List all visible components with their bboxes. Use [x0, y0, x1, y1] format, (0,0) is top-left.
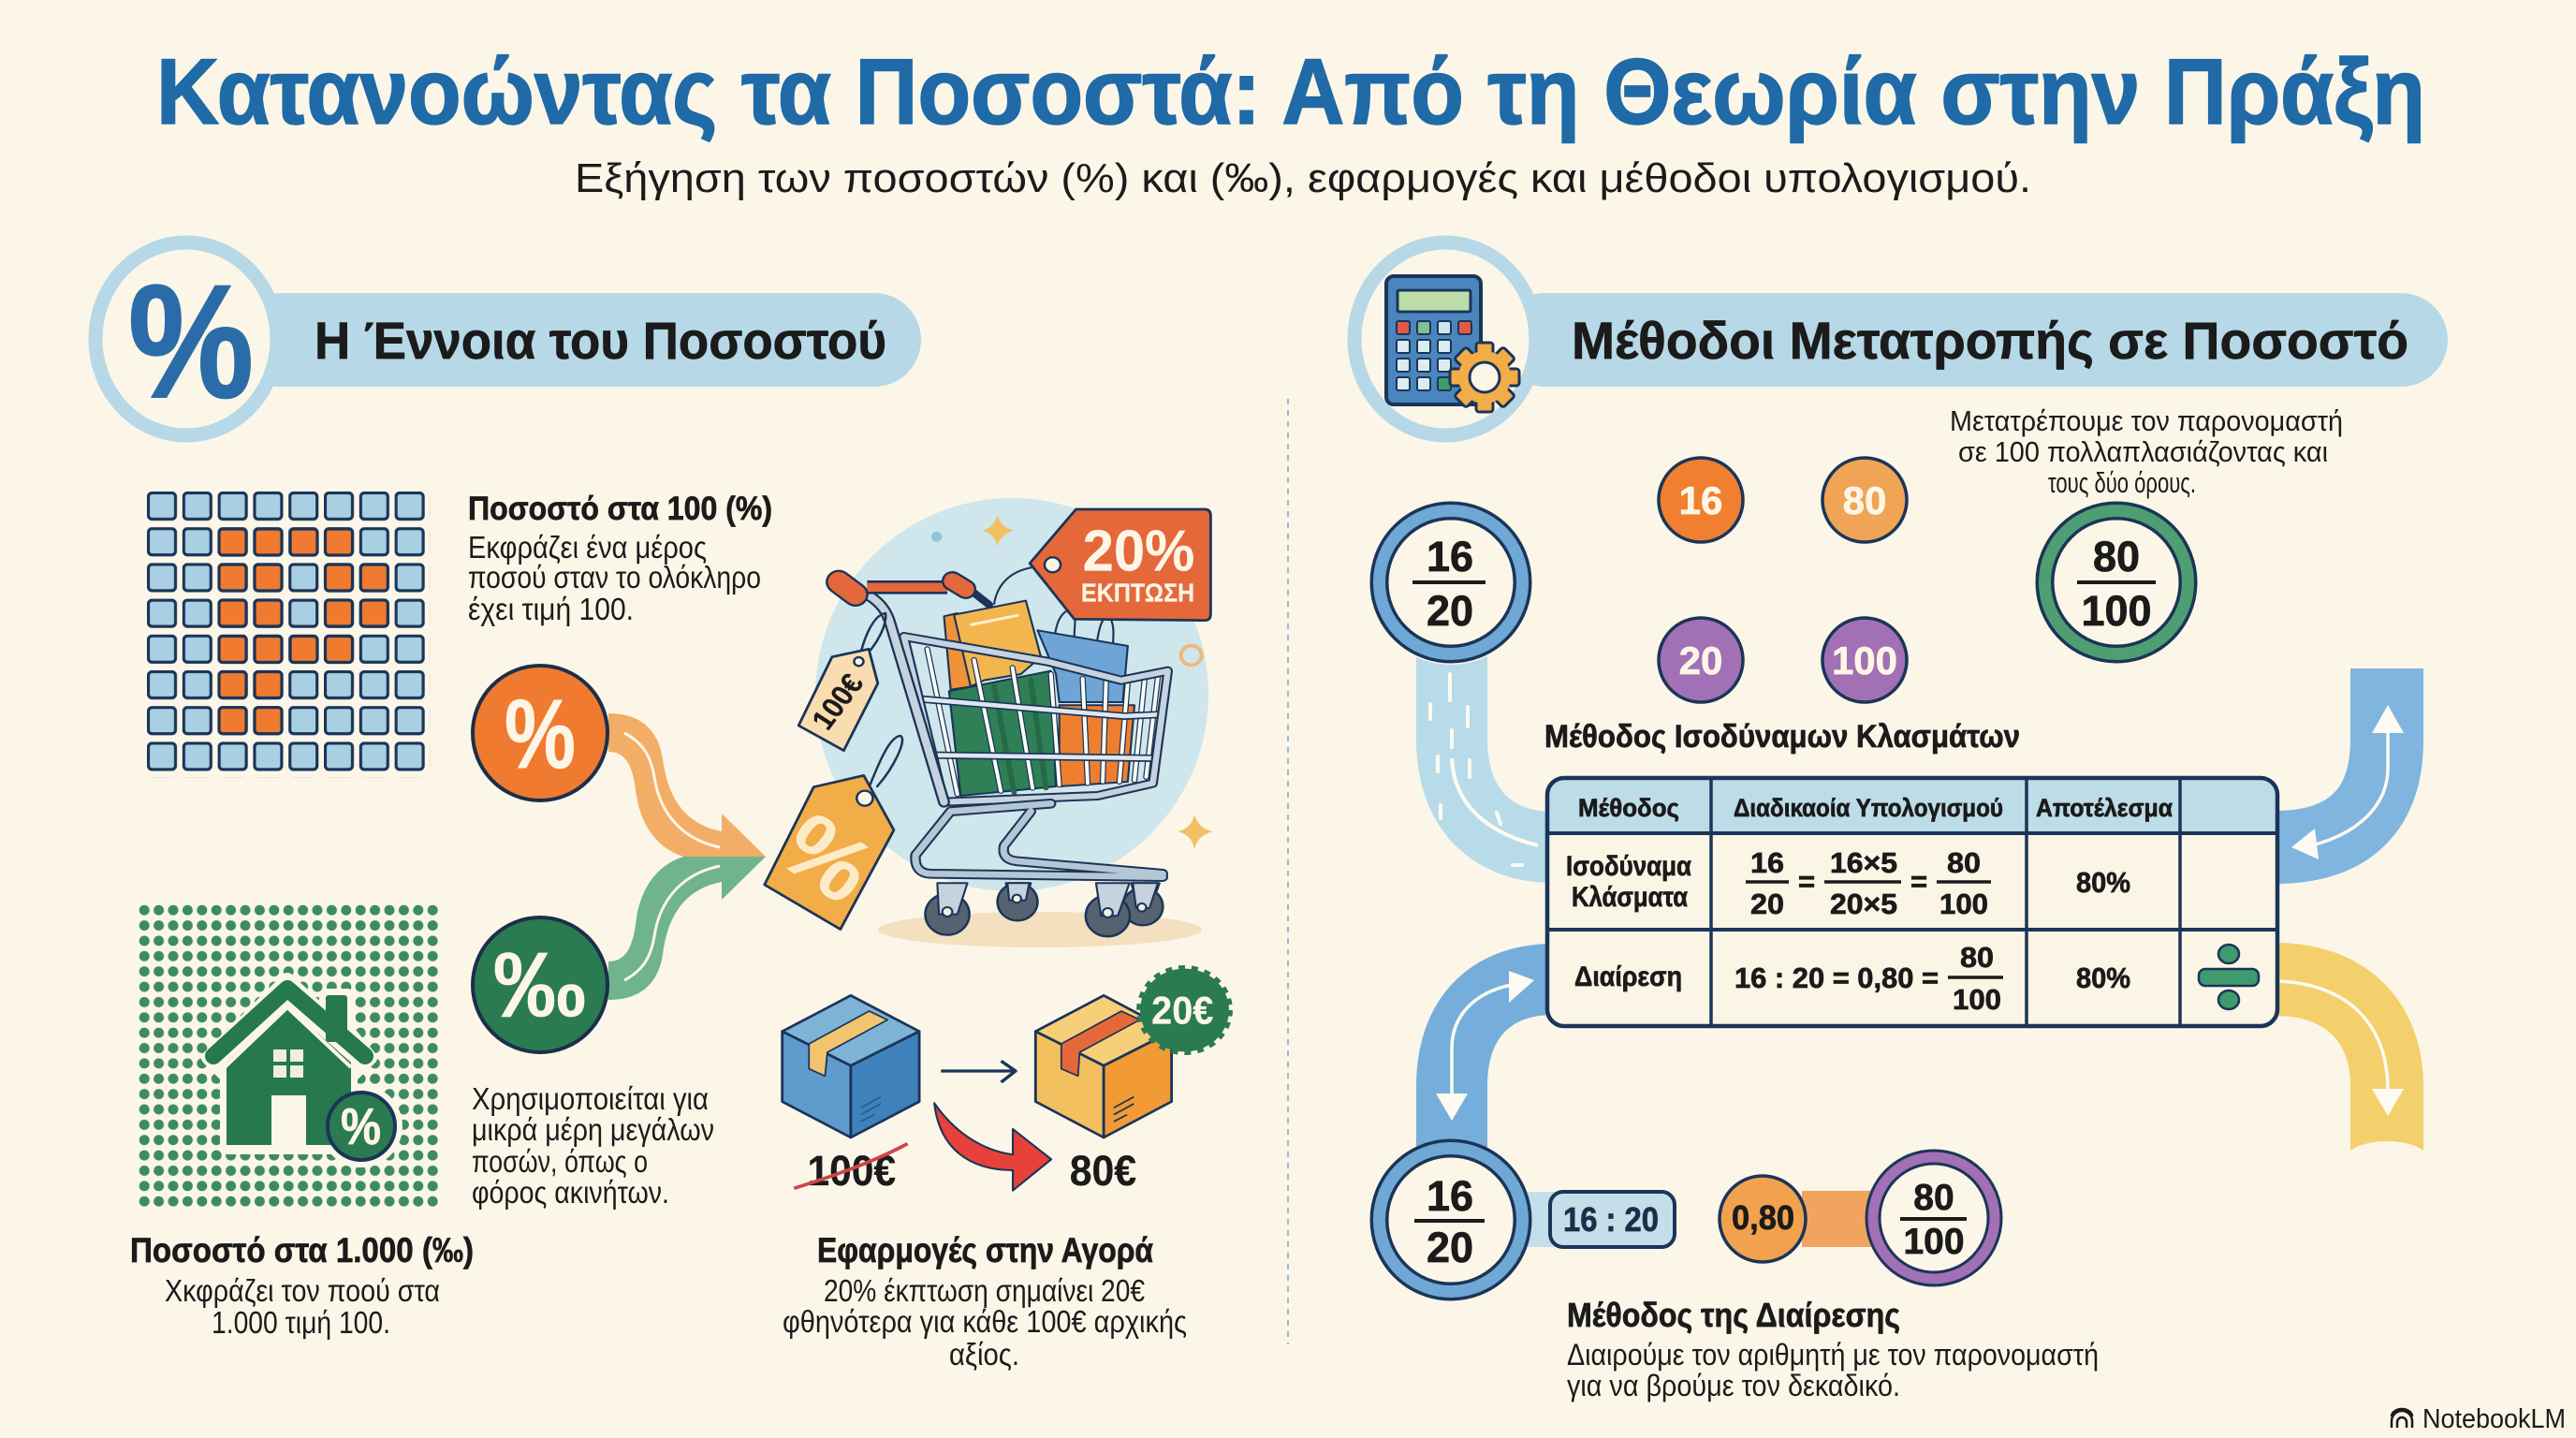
circle: 0,80	[1720, 1176, 1806, 1262]
table row: equivalent fractions	[1566, 846, 2130, 920]
link to division box	[1521, 1192, 1559, 1247]
cart wheels	[925, 883, 1163, 936]
tag: 100 euro: 100€	[805, 668, 871, 736]
text block: division method: για να βρούμε τον δεκαδικό.	[1567, 1369, 1900, 1402]
icon: house on dot field	[137, 902, 440, 1209]
circle: 100: 100	[1832, 638, 1897, 682]
text block: division method	[1567, 1296, 2099, 1402]
icon: calculator with gear	[1386, 276, 1519, 412]
section heading: Μέθοδοι Μετατροπής σε Ποσοστό	[1572, 311, 2408, 370]
icon: orange percent circle	[473, 666, 607, 800]
subtitle: Εξήγηση των ποσοστών (%) και (‰), εφαρμογές και μέθοδοι υπολογισμού.	[575, 155, 2031, 201]
table row: division	[1574, 941, 2259, 1016]
text block: percent of 100: Εκφράζει ένα μέρος	[468, 530, 707, 565]
text block: division method: Διαιρούμε τον αριθμητή με τον παρονομαστή	[1567, 1338, 2099, 1372]
section header: methods	[1354, 242, 2448, 435]
cart handle	[839, 581, 966, 594]
text block: market applications: 20% έκπτωση σημαίνει 20€	[824, 1273, 1145, 1308]
logo: NotebookLM: NotebookLM	[2422, 1404, 2566, 1434]
fraction circle: 16 over 20 (bottom): 20	[1427, 1224, 1473, 1271]
table row: equivalent fractions: 80%	[2076, 866, 2130, 899]
fraction circle: 16 over 20 (top): 16	[1427, 533, 1473, 580]
circle: 20	[1659, 618, 1743, 702]
text: small parts usage: φόρος ακινήτων.	[472, 1175, 669, 1210]
table row: equivalent fractions: 20	[1750, 888, 1784, 920]
price: new: 80€	[1070, 1146, 1136, 1195]
text block: market applications: Εφαρμογές στην Αγορά	[817, 1231, 1153, 1269]
text: multiply both terms: τους δύο όρους.	[2048, 466, 2196, 499]
table row: equivalent fractions: Κλάσματα	[1572, 882, 1688, 913]
table row: division: 16 : 20 = 0,80 =	[1734, 961, 1939, 994]
tag: percent: %	[761, 794, 894, 923]
text block: percent of 100	[468, 491, 772, 626]
panel: conversion methods	[1354, 242, 2448, 1402]
text block: percent of 1000: Ποσοστό στα 1.000 (‰)	[130, 1231, 474, 1269]
cart contents	[944, 601, 1134, 796]
connector: blue up	[2275, 668, 2404, 859]
fraction circle: 16 over 20 (bottom): 16	[1427, 1172, 1473, 1220]
text: multiply both terms: σε 100 πολλαπλασιάζοντας και	[1958, 435, 2328, 468]
connector: light blue	[1430, 646, 1554, 865]
title: Κατανοώντας τα Ποσοστά: Από τη Θεωρία στην Πράξη	[156, 39, 2425, 143]
table row: division: 80	[1960, 941, 1994, 974]
text: small parts usage: μικρά μέρη μεγάλων	[472, 1112, 714, 1147]
circle: 0,80: 0,80	[1732, 1198, 1794, 1237]
badge: 20 euro: 20€	[1151, 990, 1213, 1033]
text block: market applications	[783, 1231, 1187, 1372]
fraction circle: 80 over 100 (top)	[2034, 500, 2199, 665]
section header: concept	[95, 242, 921, 435]
table header	[1578, 794, 2173, 822]
circle: 80: 80	[1843, 478, 1886, 522]
circle: 100	[1822, 618, 1907, 702]
panel: concept of percentage	[95, 242, 1229, 1372]
table row: equivalent fractions: 16×5	[1830, 846, 1897, 879]
icon: orange percent circle: %	[505, 680, 576, 789]
text block: market applications: φθηνότερα για κάθε 100€ αρχικής	[783, 1304, 1187, 1339]
icon: blue box	[783, 995, 919, 1137]
text block: percent of 100: Ποσοστό στα 100 (%)	[468, 491, 772, 527]
chart: 8x8 percent grid	[147, 492, 430, 778]
table row: equivalent fractions: Ισοδύναμα	[1566, 851, 1691, 882]
table row: equivalent fractions: 80	[1947, 846, 1981, 879]
icon: divide sign	[2199, 945, 2259, 1009]
number circles	[1659, 458, 1907, 702]
arrow: red curved	[934, 1103, 1051, 1191]
text block: percent of 1000: 1.000 τιμή 100.	[212, 1305, 390, 1340]
connector: yellow down	[2275, 979, 2430, 1181]
text: small parts usage	[472, 1081, 714, 1210]
circle: 80	[1822, 458, 1907, 542]
fraction circle: 80 over 100 (top): 100	[2081, 587, 2152, 635]
text block: percent of 1000: Χκφράζει τον ποού στα	[165, 1273, 440, 1308]
connector: blue down	[1436, 971, 1554, 1161]
box: 16 divided by 20	[1550, 1192, 1675, 1247]
circle: 16	[1659, 458, 1743, 542]
text: small parts usage: ποσών, όπως ο	[472, 1144, 648, 1179]
link: decimal to fraction	[1802, 1191, 1877, 1247]
cart wires	[867, 593, 1168, 877]
table row: equivalent fractions: =	[1798, 865, 1815, 898]
fraction circle: 80 over 100 (bottom): 100	[1903, 1222, 1965, 1262]
section heading: Η Έννοια του Ποσοστού	[315, 311, 886, 370]
text block: division method: Μέθοδος της Διαίρεσης	[1567, 1296, 1900, 1334]
text block: percent of 1000	[130, 1231, 474, 1340]
table header: Μέθοδος	[1578, 794, 1679, 822]
arrow: green to cart	[608, 857, 766, 1000]
illustration: shopping cart with tags	[761, 498, 1213, 947]
tag: percent	[761, 736, 902, 930]
fraction circle: 16 over 20 (top): 20	[1427, 587, 1473, 635]
table row: division: 100	[1953, 983, 2001, 1016]
table row: division: 80%	[2076, 961, 2130, 994]
fraction circle: 80 over 100 (top): 80	[2093, 533, 2140, 580]
fraction circle: 16 over 20 (top)	[1368, 500, 1533, 665]
tag: 100 euro	[798, 613, 886, 751]
fraction circle: 16 over 20 (bottom)	[1380, 1148, 1559, 1292]
arrow: black right	[941, 1061, 1016, 1082]
badge: 20 euro	[1140, 969, 1229, 1051]
icon: orange box	[1035, 995, 1172, 1137]
text: small parts usage: Χρησιμοποιείται για	[472, 1081, 709, 1116]
table row: equivalent fractions: 16	[1750, 846, 1784, 879]
table row: equivalent fractions: 20×5	[1830, 888, 1897, 920]
fraction circle: 80 over 100 (bottom)	[1873, 1157, 1995, 1279]
text: multiply both terms	[1950, 404, 2343, 499]
table row: equivalent fractions: =	[1910, 865, 1927, 898]
icon: percent sign: %	[128, 252, 254, 432]
circle: 16: 16	[1679, 478, 1722, 522]
arrow: orange to cart	[608, 713, 766, 857]
tag: 20% discount: 20%	[1083, 518, 1194, 583]
table: comparison of methods	[1547, 778, 2277, 1026]
icon: green per-mille circle: ‰	[493, 933, 586, 1036]
table header: Αποτέλεσμα	[2036, 794, 2173, 822]
text: multiply both terms: Μετατρέπουμε τον παρονομαστή	[1950, 404, 2343, 437]
price: old: 100€	[807, 1146, 896, 1195]
illustration: discount boxes	[783, 969, 1229, 1195]
tag: 20% discount: ΕΚΠΤΩΣΗ	[1081, 579, 1194, 607]
circle: 20: 20	[1679, 638, 1722, 682]
sparkles	[931, 515, 1213, 849]
heading: equivalent fractions method: Μέθοδος Ισοδύναμων Κλασμάτων	[1544, 719, 2020, 755]
text block: percent of 100: έχει τιμή 100.	[468, 592, 634, 626]
divider	[1287, 399, 1289, 1344]
icon: green per-mille circle	[473, 917, 607, 1052]
table row: division: Διαίρεση	[1574, 961, 1682, 992]
table row: equivalent fractions: 100	[1939, 888, 1988, 920]
table header: Διαδικαοία Υπολογισμού	[1734, 794, 2003, 822]
icon: house on dot field: %	[341, 1097, 381, 1155]
box: 16 divided by 20: 16 : 20	[1563, 1200, 1659, 1239]
text block: percent of 100: ποσού σταν το ολόκληρο	[468, 560, 761, 594]
tag: 20% discount	[994, 509, 1210, 621]
text block: market applications: αξίος.	[949, 1337, 1019, 1372]
fraction circle: 80 over 100 (bottom): 80	[1913, 1178, 1954, 1218]
